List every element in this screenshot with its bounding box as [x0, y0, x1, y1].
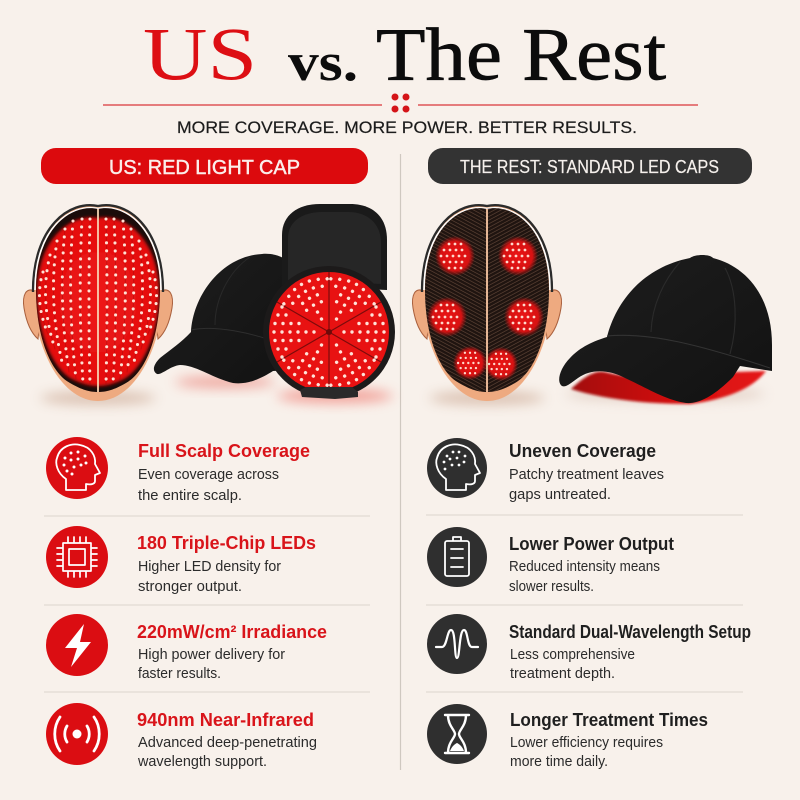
description: Less comprehensive	[510, 647, 635, 663]
description: Patchy treatment leaves	[509, 467, 664, 483]
illustration: head with patchy LED coverage	[412, 200, 562, 405]
column divider	[400, 154, 402, 770]
description	[138, 647, 285, 682]
illustration: head with full LED coverage	[23, 200, 173, 405]
feature dividers: the rest	[426, 515, 743, 692]
description	[510, 735, 663, 770]
title: vs.	[288, 32, 358, 92]
feature: uneven coverage	[427, 438, 664, 503]
feature: longer treatment times	[427, 704, 708, 770]
description: Even coverage across	[138, 467, 279, 483]
illustration: standard black cap	[559, 255, 772, 404]
description	[509, 559, 660, 595]
icon: battery	[427, 527, 487, 587]
title ornament rule	[103, 94, 698, 112]
description: High power delivery for	[138, 647, 285, 663]
icon: hourglass	[427, 704, 487, 764]
feature: dual wavelength	[427, 614, 751, 682]
feature: 180 triple-chip LEDs	[46, 526, 316, 595]
icon: signal waves	[46, 703, 108, 765]
heading: 940nm Near-Infrared	[137, 710, 314, 730]
description: the entire scalp.	[138, 488, 242, 504]
heading: 180 Triple-Chip LEDs	[137, 533, 316, 553]
heading: 220mW/cm² Irradiance	[137, 622, 327, 642]
description	[138, 467, 279, 504]
description	[509, 467, 664, 503]
heading: Uneven Coverage	[509, 441, 656, 461]
feature: near-infrared	[46, 703, 317, 770]
title: The Rest	[376, 12, 666, 96]
description: gaps untreated.	[509, 487, 611, 503]
icon: head with dots	[46, 437, 108, 499]
description	[510, 647, 635, 682]
illustration: black cap, exterior	[154, 254, 290, 388]
feature: full scalp coverage	[46, 437, 310, 504]
panel header: the rest	[428, 148, 752, 184]
description: wavelength support.	[137, 754, 267, 770]
title: US	[143, 13, 257, 96]
description: treatment depth.	[510, 666, 615, 682]
description: Higher LED density for	[138, 559, 281, 575]
heading: Longer Treatment Times	[510, 710, 708, 730]
description: stronger output.	[138, 579, 242, 595]
feature: lower power output	[427, 527, 674, 595]
feature: irradiance	[46, 614, 327, 682]
panel header: us: US: RED LIGHT CAP	[109, 157, 300, 179]
description: more time daily.	[510, 754, 608, 770]
icon: head with sparse dots	[427, 438, 487, 498]
description: Lower efficiency requires	[510, 735, 663, 751]
description: Reduced intensity means	[509, 559, 660, 575]
feature dividers: us	[44, 516, 370, 692]
heading: Standard Dual-Wavelength Setup	[509, 622, 751, 642]
description: slower results.	[509, 579, 594, 595]
description	[137, 735, 317, 770]
illustration: open LED cap panel	[263, 204, 395, 403]
heading: Lower Power Output	[509, 534, 674, 554]
description	[138, 559, 281, 595]
title	[143, 12, 666, 96]
panel header: the rest: THE REST: STANDARD LED CAPS	[460, 156, 719, 177]
icon: chip	[46, 526, 108, 588]
description: Advanced deep-penetrating	[138, 735, 317, 751]
icon: waveform	[427, 614, 487, 674]
description: faster results.	[138, 666, 221, 682]
heading: Full Scalp Coverage	[138, 441, 310, 461]
subtitle: MORE COVERAGE. MORE POWER. BETTER RESULTS.	[177, 118, 637, 137]
icon: lightning bolt	[46, 614, 108, 676]
panel header: us	[41, 148, 368, 184]
